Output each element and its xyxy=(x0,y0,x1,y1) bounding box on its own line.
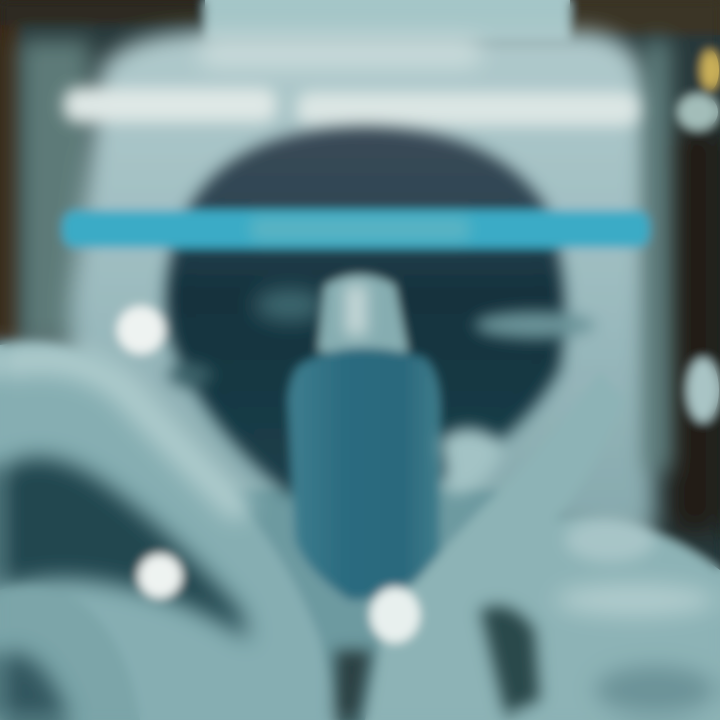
left hand xyxy=(0,342,340,720)
right hand xyxy=(335,370,720,720)
jar label: blurred white text bands xyxy=(64,38,639,126)
cyan banner bar xyxy=(62,210,650,248)
dark circle behind bottle xyxy=(166,126,595,495)
bottle xyxy=(288,275,440,600)
highlights: white blurred spots xyxy=(117,50,719,643)
